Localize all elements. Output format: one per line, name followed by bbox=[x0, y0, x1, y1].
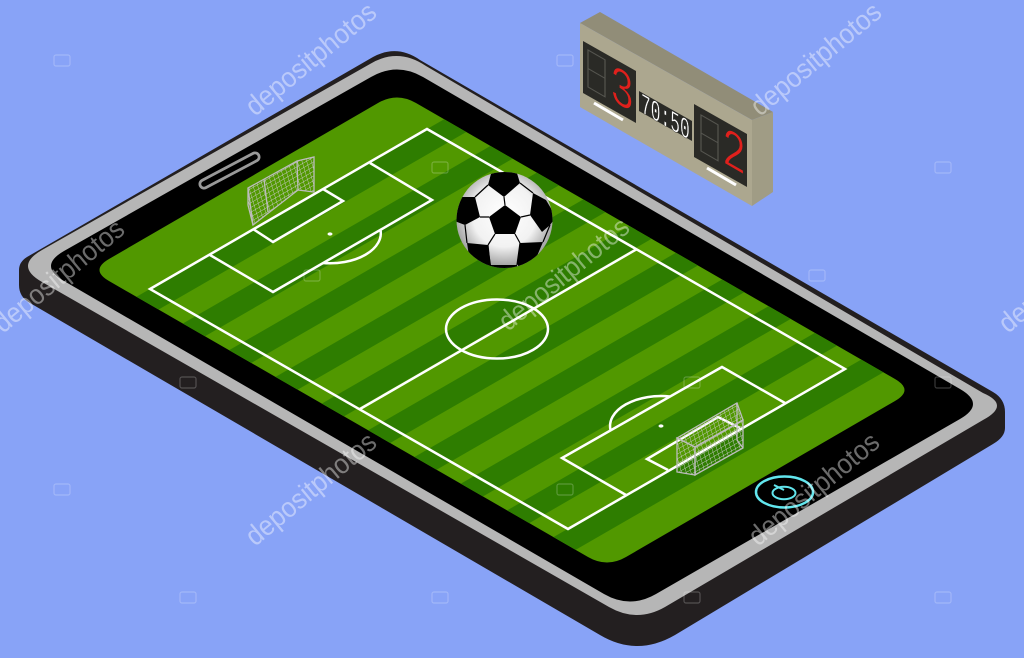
football pitch bbox=[100, 98, 904, 562]
home button bbox=[756, 476, 813, 508]
stock watermark: depositphotos bbox=[239, 426, 382, 552]
lower goal bbox=[677, 403, 743, 475]
scoreboard bbox=[580, 12, 773, 206]
scoreboard side face bbox=[752, 112, 773, 206]
tablet black screen bbox=[51, 70, 973, 602]
home score panel bbox=[583, 41, 636, 131]
pitch turf bbox=[100, 98, 904, 562]
soccer ball bbox=[456, 172, 552, 268]
stock watermark: depositphotos bbox=[742, 426, 885, 552]
mown stripes bbox=[136, 119, 884, 550]
upper goal bbox=[248, 157, 314, 225]
ball sphere bbox=[456, 172, 552, 268]
match clock: 70:50 bbox=[641, 89, 690, 150]
ball patches bbox=[456, 172, 552, 268]
scoreboard front face bbox=[580, 23, 752, 206]
away score panel: 2 bbox=[722, 116, 746, 193]
stock watermark: depositphotos bbox=[492, 211, 635, 337]
away score panel bbox=[694, 104, 747, 193]
pitch markings bbox=[150, 129, 845, 529]
scoreboard top face bbox=[580, 12, 773, 120]
speaker slot bbox=[204, 157, 255, 184]
watermark camera marks bbox=[54, 55, 951, 603]
home score panel: 3 bbox=[610, 54, 634, 131]
